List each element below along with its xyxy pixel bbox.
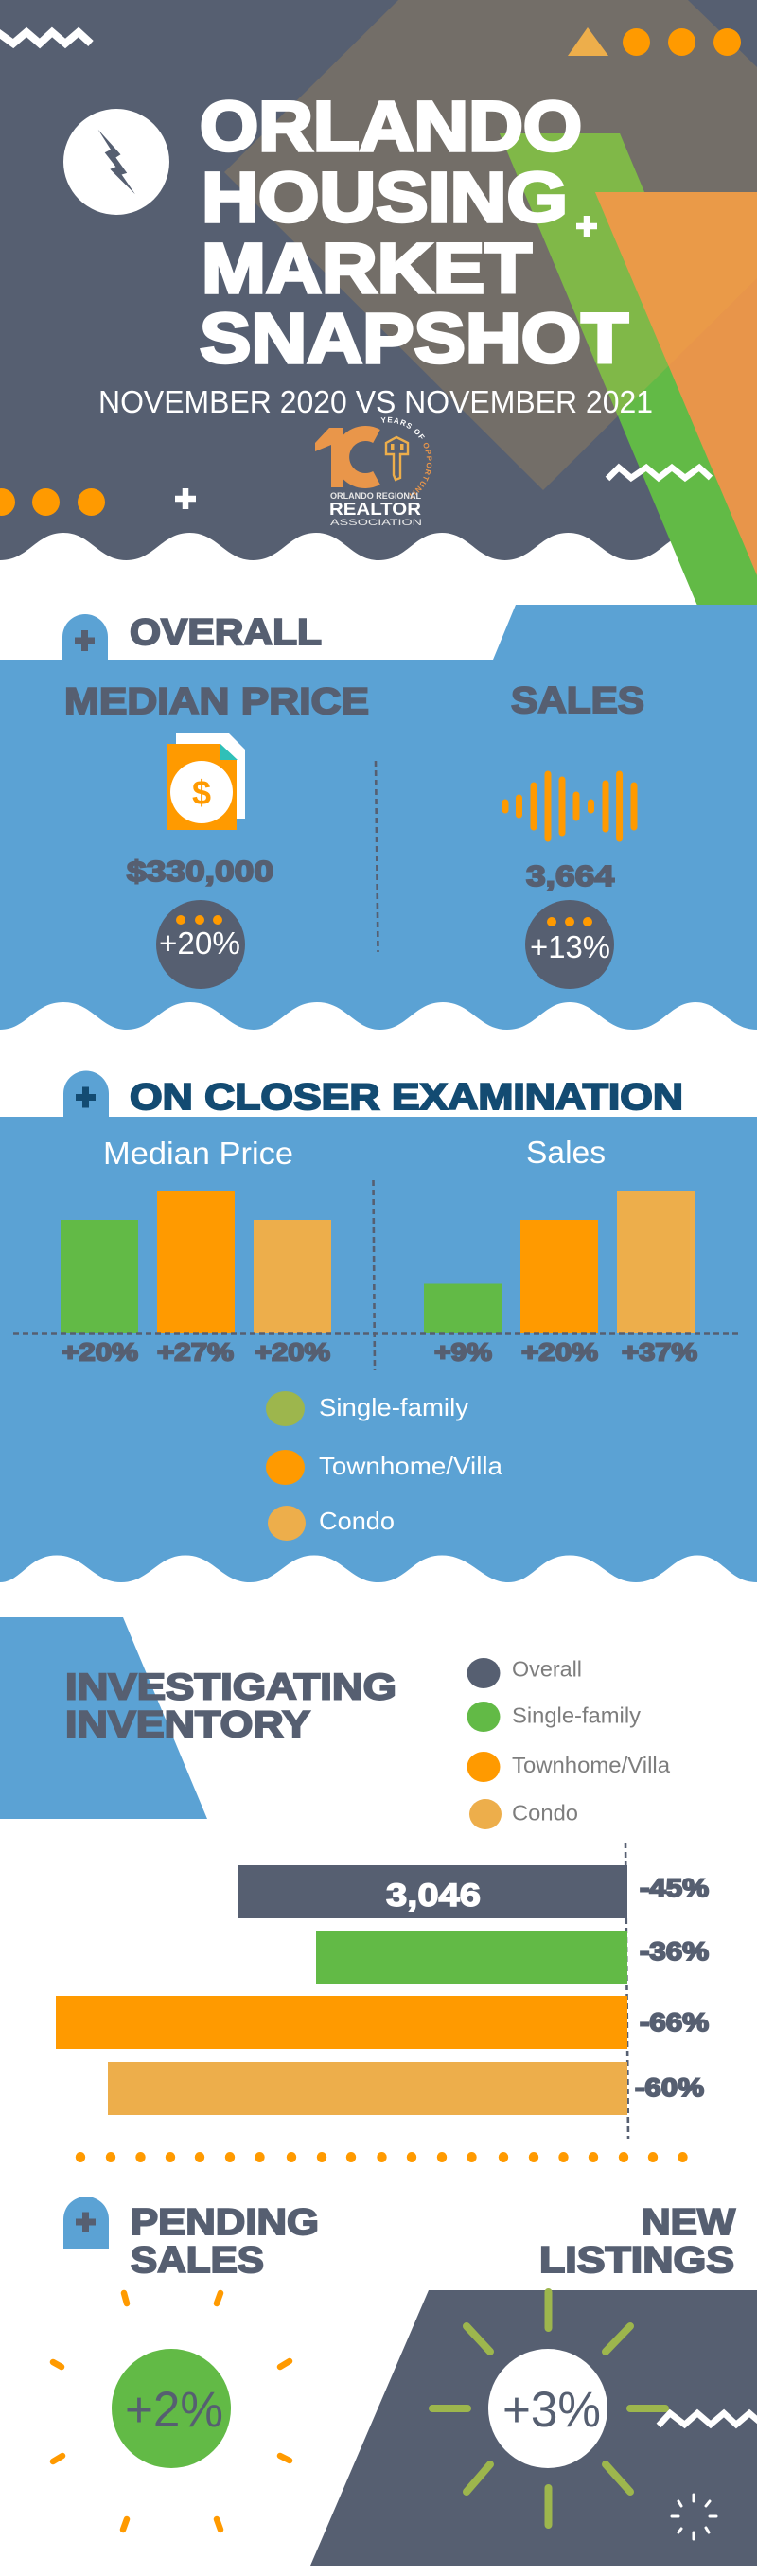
icon: plus tab	[63, 2197, 109, 2249]
bar labels: +20%	[62, 1338, 138, 1367]
badge: +13%	[525, 900, 614, 989]
inventory change labels: -60%	[635, 2073, 704, 2102]
panel: new listings	[310, 2202, 757, 2566]
legend: Condo	[319, 1507, 395, 1535]
badge: +20%	[156, 900, 245, 989]
heading: INVESTIGATING	[65, 1667, 396, 1707]
badge: +2%	[112, 2349, 231, 2468]
badge: +13%: +13%	[530, 929, 610, 964]
chart title: sales: Sales	[526, 1135, 606, 1170]
bar labels: +20%	[521, 1338, 598, 1367]
icon: left dots	[0, 488, 105, 516]
title	[200, 87, 628, 378]
icon: zigzag	[659, 2413, 757, 2426]
panel: hero background	[0, 0, 757, 606]
icon: price document	[167, 733, 245, 830]
legend: Townhome/Villa	[512, 1753, 670, 1777]
bar chart: inventory	[56, 1843, 628, 2139]
icon: green rays	[432, 2292, 665, 2525]
badge: +3%: +3%	[502, 2382, 601, 2438]
icon: triangle and dots	[568, 27, 741, 56]
icon: plus tab	[75, 630, 95, 651]
bar labels: +27%	[157, 1338, 234, 1367]
logo: Orlando Regional Realtor Association: REALTOR	[329, 500, 421, 519]
bar labels: +37%	[622, 1338, 697, 1367]
value: median price: $330,000	[127, 855, 273, 888]
bar labels: +20%	[255, 1338, 330, 1367]
title: SNAPSHOT	[200, 299, 628, 378]
title: ORLANDO	[200, 87, 582, 166]
legend: Single-family	[512, 1703, 642, 1728]
icon: small white burst	[672, 2495, 716, 2539]
icon: right zigzag	[607, 468, 711, 479]
logo: Orlando Regional Realtor Association: ORLANDO REGIONAL	[330, 491, 422, 501]
panel: on closer examination	[0, 1071, 757, 1582]
bar chart: median price	[61, 1191, 331, 1333]
inventory change labels	[635, 1874, 709, 2102]
chart axis dividers	[13, 1180, 739, 1370]
bar labels: +9%	[434, 1338, 492, 1367]
panel: investigating inventory	[0, 1617, 709, 2139]
subtitle: NOVEMBER 2020 VS NOVEMBER 2021	[98, 384, 653, 419]
heading: NEW	[642, 2202, 735, 2243]
logo: Orlando Regional Realtor Association: ASSOCIATION	[330, 518, 422, 528]
slate shape	[310, 2290, 757, 2566]
bar chart: inventory: 3,046	[386, 1878, 481, 1914]
panel: pending sales	[53, 2197, 319, 2530]
value: sales: 3,664	[526, 859, 615, 892]
legend: Condo	[512, 1800, 578, 1825]
legend: Townhome/Villa	[319, 1452, 503, 1480]
inventory change labels: -36%	[640, 1937, 709, 1966]
badge: +20%: +20%	[159, 926, 240, 961]
heading: LISTINGS	[539, 2240, 734, 2281]
inventory change labels: -66%	[640, 2008, 709, 2037]
heading	[65, 1667, 396, 1745]
bar chart: sales	[424, 1191, 695, 1333]
panel background	[0, 1071, 757, 1582]
bar labels	[62, 1338, 697, 1367]
divider	[376, 761, 378, 952]
icon: plus near title	[576, 216, 597, 237]
badge: +2%: +2%	[125, 2382, 223, 2438]
heading: PENDING	[131, 2202, 319, 2243]
blue shape	[0, 1617, 207, 1819]
icon: plus tab	[76, 1086, 96, 1107]
icon: lightning bolt in circle	[63, 109, 169, 215]
logo: Orlando Regional Realtor Association: YEARS OF OPPORTUNITIES	[380, 416, 431, 500]
heading: median price: MEDIAN PRICE	[64, 681, 369, 722]
icon: price document: $	[192, 773, 211, 812]
heading: INVENTORY	[65, 1704, 310, 1745]
heading: ON CLOSER EXAMINATION	[130, 1077, 683, 1118]
legend: Single-family	[319, 1393, 468, 1421]
inventory change labels: -45%	[640, 1874, 709, 1902]
icon: orange rays	[53, 2293, 290, 2530]
title: MARKET	[202, 229, 532, 308]
logo: Orlando Regional Realtor Association	[315, 416, 431, 528]
heading	[131, 2202, 319, 2281]
heading	[539, 2202, 735, 2281]
legend: Overall	[512, 1656, 582, 1681]
heading: overall: OVERALL	[130, 612, 322, 653]
dotted separator	[76, 2152, 688, 2162]
icon: top left zigzag	[0, 31, 91, 44]
legend	[467, 1656, 670, 1829]
icon: sound wave	[505, 774, 634, 838]
badge: +3%	[488, 2349, 607, 2468]
title: HOUSING	[202, 158, 568, 237]
legend	[266, 1391, 503, 1541]
panel: overall	[0, 605, 757, 1030]
heading: sales: SALES	[511, 680, 644, 721]
heading: SALES	[131, 2240, 264, 2281]
panel background	[0, 605, 757, 1030]
chart title: median price: Median Price	[103, 1136, 293, 1171]
icon: plus	[175, 488, 196, 509]
